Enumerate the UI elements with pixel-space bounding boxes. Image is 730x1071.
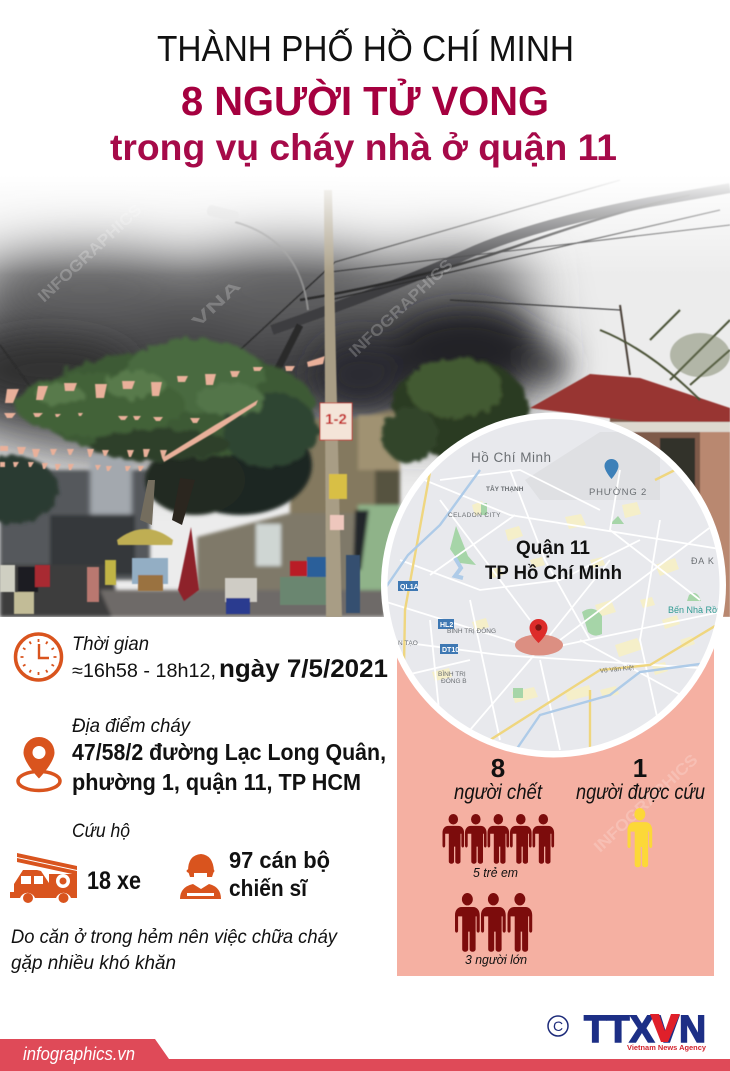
palm tree — [382, 358, 528, 463]
tree canopy — [0, 339, 318, 525]
stat: people rescued: người được cứu — [576, 781, 705, 804]
buildings — [0, 408, 400, 617]
stat: officers: 97 cán bộ — [229, 847, 330, 873]
icons: five children — [442, 814, 554, 864]
logo: TTXVN: TTXVN — [584, 1009, 706, 1051]
block: time: ngày 7/5/2021 — [219, 655, 388, 683]
stat: officers — [229, 847, 330, 901]
house with red roof — [530, 374, 730, 617]
footer site name: infographics.vn — [23, 1044, 135, 1064]
note: gặp nhiều khó khăn — [11, 953, 176, 974]
heading: rescue: Cứu hộ — [72, 821, 130, 842]
note — [11, 927, 338, 974]
logo: TTXVN: Vietnam News Agency — [627, 1043, 707, 1052]
street scene — [0, 527, 360, 614]
map labels — [398, 450, 727, 685]
map labels: CELADON CITY — [448, 512, 501, 519]
map road shields: QL1A — [400, 584, 419, 591]
title line 1: THÀNH PHỐ HỒ CHÍ MINH — [157, 27, 574, 69]
map location heading: Quận 11 — [516, 538, 590, 559]
copyright mark: C — [553, 1018, 563, 1034]
rivers — [384, 470, 700, 750]
block: fire location: phường 1, quận 11, TP HCM — [72, 769, 361, 795]
bare branches on the right — [600, 310, 730, 400]
note: Do căn ở trong hẻm nên việc chữa cháy — [11, 927, 338, 948]
stat: people dead: 5 trẻ em — [473, 866, 518, 880]
watermarks — [38, 232, 452, 358]
stat: people dead — [442, 753, 554, 967]
map circle: TP Hồ Chí Minh — [485, 563, 622, 584]
bunting flags — [0, 356, 325, 471]
icon: clock — [16, 634, 62, 680]
built-up patches — [432, 501, 695, 703]
block: fire location: Địa điểm cháy — [72, 716, 191, 737]
airport area — [525, 432, 660, 500]
map labels: Hồ Chí Minh — [471, 450, 552, 465]
icon: red location pin — [515, 619, 563, 656]
title line 2: 8 NGƯỜI TỬ VONG — [181, 78, 549, 124]
title line 3: trong vụ cháy nhà ở quận 11 — [110, 127, 617, 168]
stat: officers: chiến sĩ — [229, 875, 308, 901]
street light — [235, 221, 310, 310]
stat: people dead: người chết — [454, 781, 543, 804]
map labels: ĐA K — [691, 556, 715, 566]
block: fire location — [72, 716, 386, 795]
utility pole: 1-2 — [325, 411, 347, 428]
map circle — [380, 410, 730, 760]
photo: smoke over a street in district 11 — [0, 150, 730, 617]
stat: people dead: 8 — [491, 753, 505, 783]
utility pole — [320, 190, 352, 617]
stat: people rescued: 1 — [633, 753, 647, 783]
watermarks: INFOGRAPHICS — [35, 201, 146, 306]
block: time: Thời gian — [72, 634, 149, 655]
block: fire location: 47/58/2 đường Lạc Long Quân, — [72, 739, 386, 765]
map labels: BÌNH TRỊ — [438, 669, 466, 678]
map labels: TÂY THẠNH — [486, 484, 524, 493]
watermarks: INFOGRAPHICS — [346, 256, 457, 361]
stat: vehicles: 18 xe — [87, 867, 141, 895]
white roads — [380, 470, 730, 750]
map labels: ĐÔNG B — [441, 676, 467, 685]
block: time — [72, 634, 388, 683]
stat: people rescued — [576, 753, 705, 867]
panel: casualties — [397, 617, 714, 976]
icons: three adults — [455, 893, 532, 952]
map labels: BÌNH TRỊ ĐÔNG — [447, 626, 496, 635]
copyright mark — [548, 1016, 568, 1036]
title — [110, 27, 617, 168]
map road shields: HL2 — [440, 622, 453, 629]
top fade — [0, 150, 730, 275]
smoke — [0, 235, 545, 455]
block: time: ≈16h58 - 18h12, — [72, 661, 216, 682]
map labels: Bến Nhà Rồng — [668, 605, 727, 615]
map labels: PHƯỜNG 2 — [589, 487, 647, 498]
footer band — [0, 1039, 730, 1071]
icon: fire truck — [10, 853, 77, 903]
stat: people dead: 3 người lớn — [465, 953, 527, 967]
icon: blue map marker — [604, 459, 618, 479]
icon: firefighter — [180, 854, 221, 899]
icon: yellow person — [628, 808, 652, 867]
map labels: Võ Văn Kiệt — [599, 664, 635, 675]
highways — [404, 470, 725, 750]
icon: location pin — [18, 737, 60, 790]
map road shields — [398, 581, 459, 654]
panel watermark: INFOGRAPHICS — [591, 751, 702, 856]
green parks — [450, 503, 701, 698]
map labels: N TẠO — [398, 640, 418, 647]
watermarks: VNA — [189, 277, 245, 331]
map road shields: DT10 — [442, 647, 459, 654]
wires — [0, 180, 730, 376]
